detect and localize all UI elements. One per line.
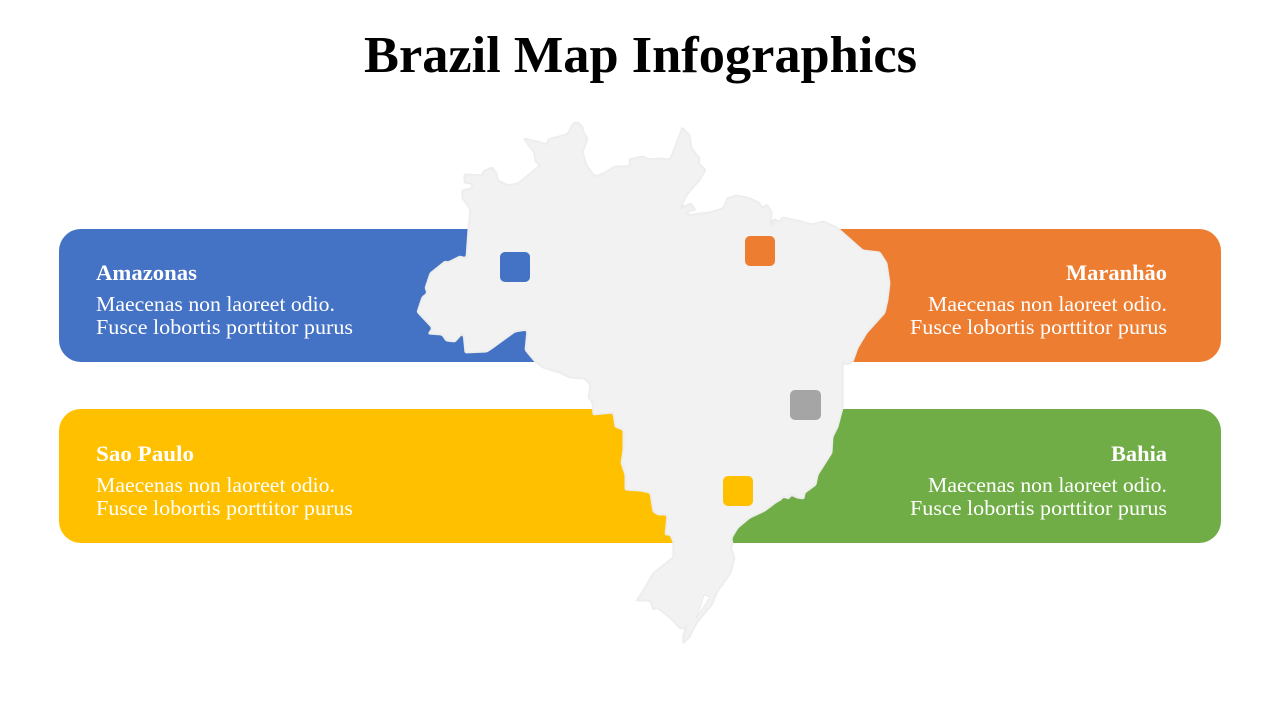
- text block: Sao Paulo: [96, 441, 353, 520]
- panel: Sao Paulo background: [59, 409, 700, 543]
- panel: Maranhão background: [780, 229, 1221, 362]
- text block: Maranhão: Maranhão: [1066, 260, 1167, 285]
- text block: Maranhão: Fusce lobortis porttitor purus: [910, 315, 1167, 339]
- text block: Maranhão: Maecenas non laoreet odio.: [928, 292, 1167, 316]
- marker: Sao Paulo: [723, 476, 753, 506]
- text block: Sao Paulo: Maecenas non laoreet odio.: [96, 473, 335, 497]
- map of Brazil: [417, 122, 890, 644]
- text block: Maranhão: [910, 260, 1167, 339]
- panel: Amazonas background: [59, 229, 620, 362]
- text block: Amazonas: Fusce lobortis porttitor purus: [96, 315, 353, 339]
- text block: Amazonas: Maecenas non laoreet odio.: [96, 292, 335, 316]
- panel: Bahia background: [700, 409, 1221, 543]
- marker: Bahia: [790, 390, 821, 420]
- text block: Bahia: [910, 441, 1167, 520]
- text block: Amazonas: Amazonas: [96, 260, 197, 285]
- marker: Maranhão: [745, 236, 775, 266]
- title: Brazil Map Infographics: [364, 27, 917, 84]
- text block: Sao Paulo: Sao Paulo: [96, 441, 194, 466]
- text block: Bahia: Bahia: [1111, 441, 1167, 466]
- text block: Sao Paulo: Fusce lobortis porttitor purus: [96, 496, 353, 520]
- marker: Amazonas: [500, 252, 530, 282]
- text block: Bahia: Fusce lobortis porttitor purus: [910, 496, 1167, 520]
- map lagoon: [696, 595, 710, 618]
- text block: Amazonas: [96, 260, 353, 339]
- text block: Bahia: Maecenas non laoreet odio.: [928, 473, 1167, 497]
